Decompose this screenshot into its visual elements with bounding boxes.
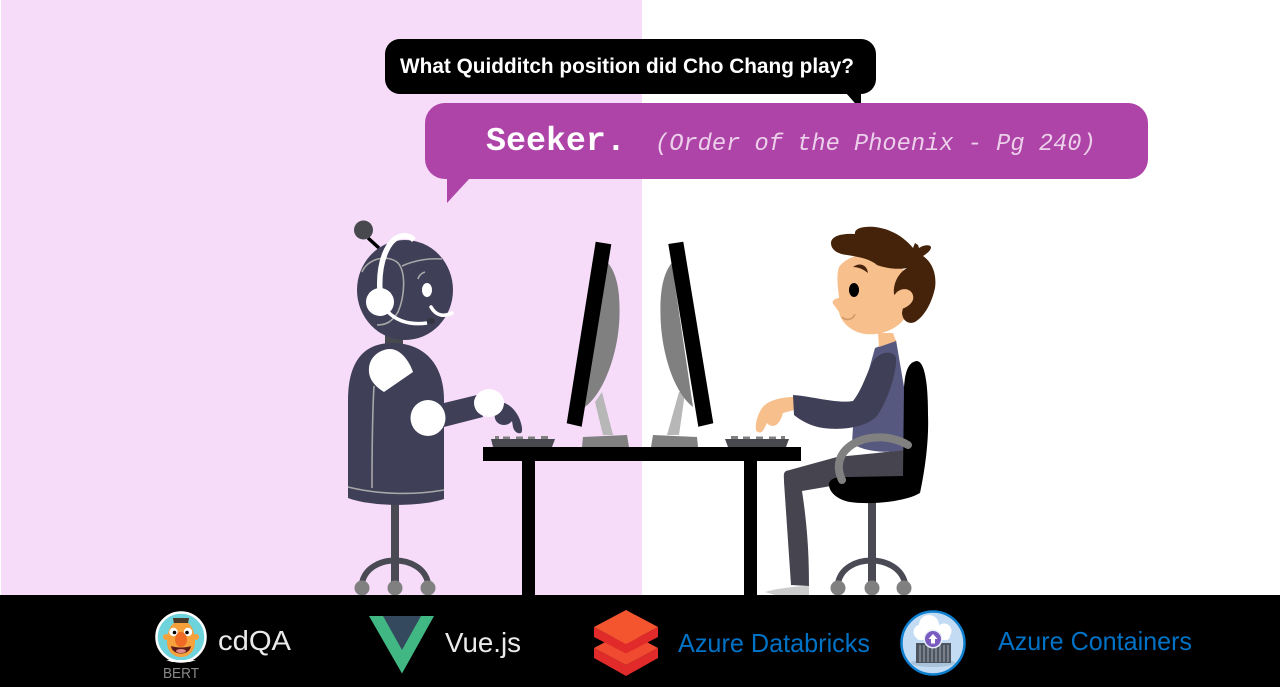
logo: cdQA BERT [156,612,291,682]
neck [878,333,896,347]
robot hand [495,402,522,433]
robot body seams [348,386,444,493]
torso [852,340,904,452]
speech bubble: question: What Quidditch position did Cho Chang play? [400,55,854,78]
label: Azure Databricks: Azure Databricks [678,628,870,658]
robot wrist joint [474,389,504,417]
eye [849,283,859,297]
icon: Bert puppet [156,612,206,662]
icon: container cloud [902,612,964,674]
person character [756,227,935,595]
robot elbow joint [410,400,446,436]
smile [842,314,855,319]
head [833,254,911,334]
robot shoulder [369,349,413,392]
robot neck [385,333,403,347]
label: Vue.js: Vue.js [445,627,521,658]
robot chair base [354,504,436,596]
right keyboard [725,436,789,447]
arm [793,353,896,429]
speech bubble: answer: (Order of the Phoenix - Pg 240) [655,131,1096,158]
eyebrow [853,265,868,273]
robot eye [422,283,432,297]
shoe [765,586,809,595]
ear [894,289,913,309]
speech bubble: question [385,39,876,110]
robot headset [366,236,435,324]
hair [831,227,935,323]
footer band [0,595,1280,687]
armrest [839,437,908,480]
caption: BERT: BERT [163,666,199,682]
logo: Vue.js [369,616,521,674]
robot smile [431,307,452,315]
panel: pink robot side background [1,0,642,596]
left keyboard [491,436,555,447]
robot antenna [354,220,379,248]
hand [756,397,794,433]
robot arm [444,395,483,427]
speech bubble: answer: Seeker. [486,122,626,160]
icon: Vue chevron [369,616,434,674]
legs [784,450,904,586]
desk [483,447,801,596]
speech bubble: answer [425,103,1148,203]
label: Azure Containers: Azure Containers [998,626,1192,656]
logo: Azure Containers [902,612,1192,674]
robot character [348,220,522,596]
left monitor [567,242,629,447]
logo: Azure Databricks [594,610,870,676]
right monitor [651,242,713,447]
robot body [348,343,444,505]
chair back and seat [829,361,928,503]
robot head seams [362,258,442,325]
chair base [830,500,912,596]
label: cdQA: cdQA [218,625,291,656]
robot head [357,240,453,340]
icon: Databricks stack [594,610,658,676]
